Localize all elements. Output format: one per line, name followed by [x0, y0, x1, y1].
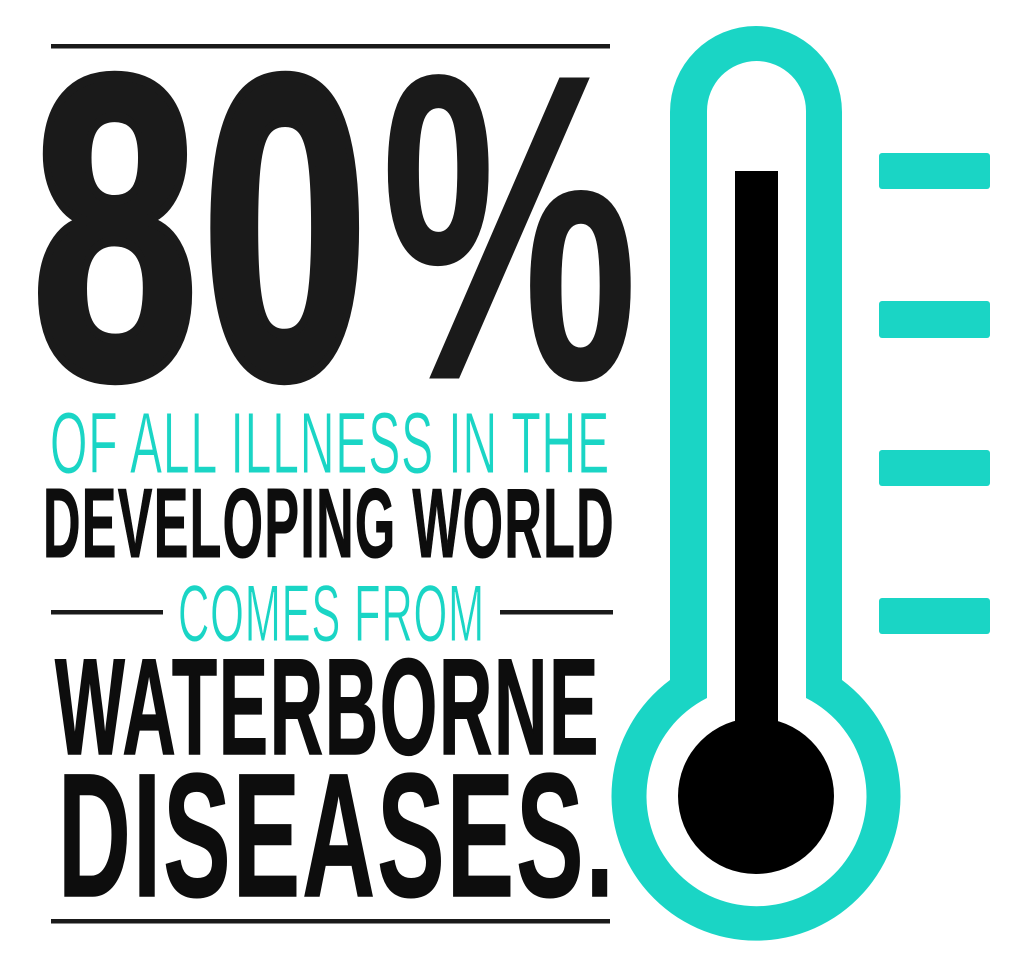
left divider	[51, 610, 163, 614]
text: comes from: COMES FROM	[178, 569, 485, 659]
text: diseases: DISEASES.	[58, 738, 616, 934]
tick 1	[879, 153, 990, 189]
thermometer casing	[612, 26, 901, 941]
top rule	[51, 44, 610, 48]
mercury bulb	[678, 718, 834, 874]
number 80: 80	[32, 0, 372, 468]
mercury column	[735, 171, 778, 751]
headline statistic: 80%	[32, 0, 638, 471]
right divider	[500, 610, 613, 614]
bottom rule	[51, 919, 610, 924]
tick 3	[879, 450, 990, 486]
tick 2	[879, 301, 990, 338]
scale ticks	[879, 153, 990, 634]
tick 4	[879, 598, 990, 634]
icon: thermometer	[612, 26, 990, 941]
